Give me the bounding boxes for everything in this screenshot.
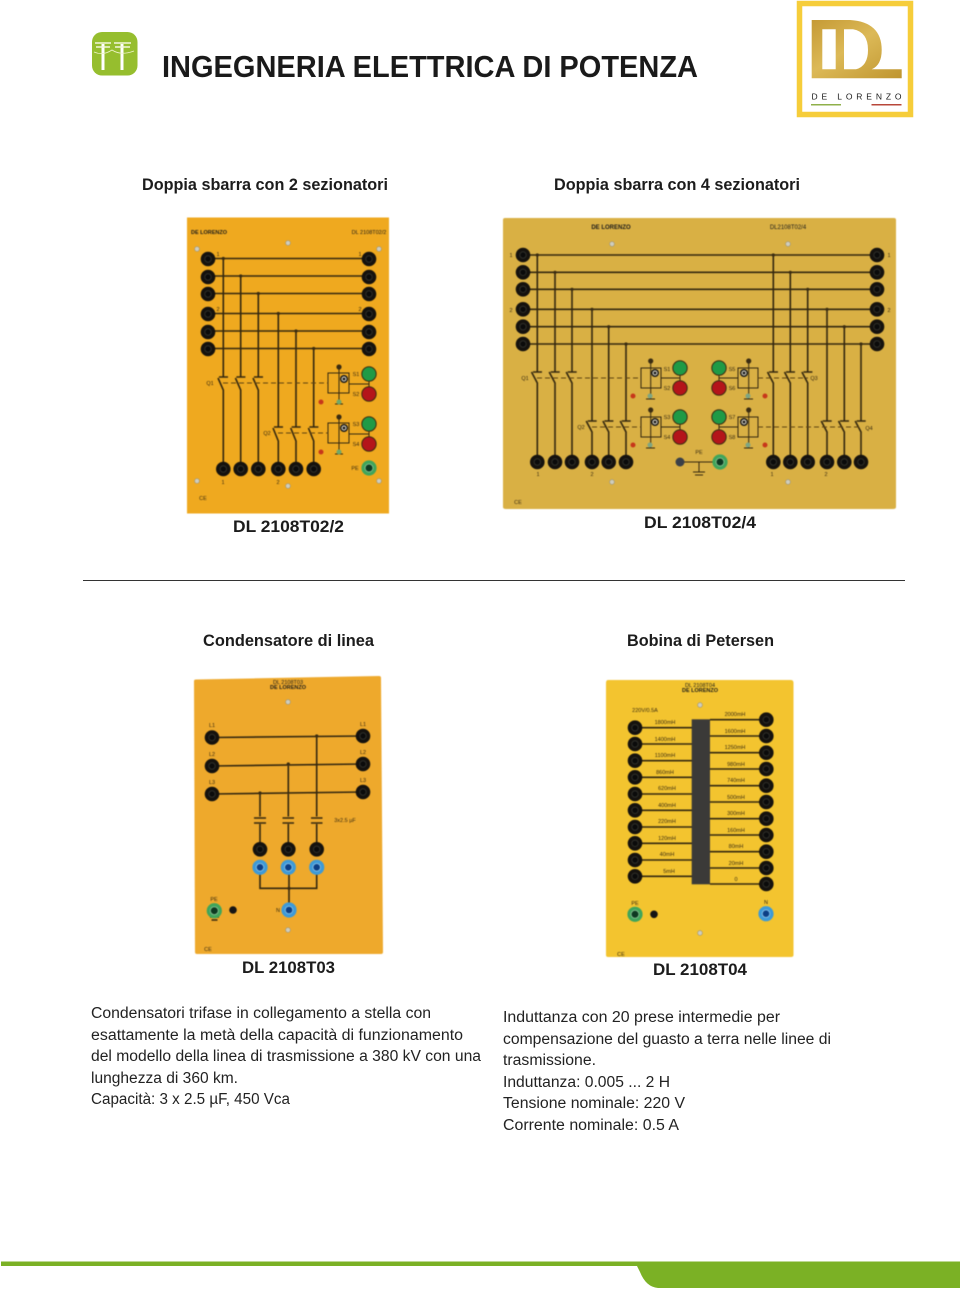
panel: DL 2108T02/4: S2 bbox=[664, 386, 670, 392]
panel: DL 2108T02/4: PE bbox=[695, 450, 703, 456]
panel: DL 2108T03: L3 bbox=[360, 778, 366, 784]
panel: DL 2108T02/2: 2 bbox=[358, 307, 362, 313]
panel: DL 2108T02/2: S4 bbox=[353, 442, 359, 448]
panel: DL 2108T04: CE bbox=[617, 952, 625, 958]
logo: De Lorenzo bbox=[800, 4, 910, 114]
panel: DL 2108T04: 5mH bbox=[663, 869, 675, 875]
panel: DL 2108T04 bbox=[606, 680, 794, 958]
panel: DL 2108T03: DL 2108T03 bbox=[273, 680, 303, 686]
panel: DL 2108T04: 20mH bbox=[729, 861, 743, 867]
panel: DL 2108T02/2: Q2 bbox=[263, 431, 271, 437]
panel: DL 2108T02/4: Q4 bbox=[865, 426, 873, 432]
panel: DL 2108T04: 980mH bbox=[727, 762, 745, 768]
panel: DL 2108T02/4: 2 bbox=[509, 308, 513, 314]
footer bar bbox=[1, 1262, 960, 1288]
text block: Petersen coil description: Corrente nominale: 0.5 A bbox=[503, 1117, 680, 1134]
panel: DL 2108T02/4 bbox=[503, 218, 896, 509]
panel: DL 2108T02/2: PE bbox=[351, 466, 359, 472]
text block: Petersen coil description: Induttanza: 0.005 ... 2 H bbox=[503, 1074, 670, 1091]
panel: DL 2108T02/4: S8 bbox=[729, 435, 735, 441]
panel: DL 2108T02/2: S1 bbox=[353, 372, 359, 378]
text block: capacitor description: lunghezza di 360 km. bbox=[91, 1070, 238, 1087]
panel: DL 2108T04: 620mH bbox=[658, 786, 676, 792]
text block: Petersen coil description: trasmissione. bbox=[503, 1052, 596, 1069]
panel: DL 2108T04: 1600mH bbox=[725, 729, 745, 735]
panel: DL 2108T04: 1250mH bbox=[725, 745, 745, 751]
panel: DL 2108T03: DE LORENZO bbox=[270, 685, 307, 691]
panel: DL 2108T02/4: 2 bbox=[590, 472, 594, 478]
panel: DL 2108T04: 220mH bbox=[658, 819, 676, 825]
panel: DL 2108T02/2: DL 2108T02/2 bbox=[352, 230, 386, 236]
panel: DL 2108T02/2: S3 bbox=[353, 422, 359, 428]
panel: DL 2108T02/4: 1 bbox=[509, 253, 513, 259]
logo: De Lorenzo: DE LORENZO bbox=[812, 92, 902, 102]
panel: DL 2108T04: 400mH bbox=[658, 803, 676, 809]
panel: DL 2108T02/4: CE bbox=[514, 500, 522, 506]
panel: DL 2108T02/2: 1 bbox=[221, 480, 225, 486]
label: DL 2108T03: DL 2108T03 bbox=[242, 959, 335, 977]
text block: Petersen coil description: Tensione nominale: 220 V bbox=[503, 1095, 686, 1112]
panel: DL 2108T04: 740mH bbox=[727, 778, 745, 784]
text block: capacitor description: del modello della linea di trasmissione a 380 kV con una bbox=[91, 1048, 481, 1065]
text block: capacitor description: Condensatori trifase in collegamento a stella con bbox=[91, 1005, 431, 1022]
title: INGEGNERIA ELETTRICA DI POTENZA bbox=[162, 49, 698, 84]
panel: DL 2108T02/4: Q1 bbox=[521, 376, 529, 382]
panel: DL 2108T03: L1 bbox=[209, 723, 215, 729]
panel: DL 2108T02/4: 1 bbox=[887, 253, 891, 259]
panel: DL 2108T02/4: 1 bbox=[770, 472, 774, 478]
panel: DL 2108T03: L3 bbox=[209, 780, 215, 786]
text block: Petersen coil description bbox=[503, 1009, 831, 1134]
panel: DL 2108T04: 500mH bbox=[727, 795, 745, 801]
divider bbox=[83, 580, 905, 581]
heading: double busbar 2 disconnectors: Doppia sbarra con 2 sezionatori bbox=[142, 176, 388, 194]
panel: DL 2108T02/4: DL2108T02/4 bbox=[770, 225, 807, 231]
panel: DL 2108T04: 1800mH bbox=[655, 720, 675, 726]
panel: DL 2108T03: 3x2.5 µF bbox=[334, 818, 356, 824]
panel: DL 2108T02/2 bbox=[187, 218, 389, 514]
panel: DL 2108T02/2: Q1 bbox=[206, 381, 214, 387]
panel: DL 2108T02/4: S1 bbox=[664, 367, 670, 373]
panel: DL 2108T02/4: S4 bbox=[664, 435, 670, 441]
text block: capacitor description bbox=[91, 1005, 481, 1108]
heading: line capacitor: Condensatore di linea bbox=[203, 632, 375, 650]
text block: capacitor description: Capacità: 3 x 2.5 µF, 450 Vca bbox=[91, 1091, 290, 1108]
panel: DL 2108T03: CE bbox=[204, 947, 212, 953]
panel: DL 2108T02/4: 2 bbox=[824, 472, 828, 478]
label: DL 2108T02/4: DL 2108T02/4 bbox=[644, 514, 757, 532]
panel: DL 2108T03: L2 bbox=[360, 750, 366, 756]
panel: DL 2108T02/2: 1 bbox=[358, 252, 362, 258]
heading: Petersen coil: Bobina di Petersen bbox=[627, 632, 774, 650]
label: DL 2108T02/2: DL 2108T02/2 bbox=[233, 518, 344, 536]
panel: DL 2108T02/4: S6 bbox=[729, 386, 735, 392]
panel: DL 2108T02/4: S5 bbox=[729, 367, 735, 373]
text block: Petersen coil description: compensazione del guasto a terra nelle linee di bbox=[503, 1031, 831, 1048]
panel: DL 2108T02/4: S7 bbox=[729, 415, 735, 421]
panel: DL 2108T02/2: S2 bbox=[353, 392, 359, 398]
panel: DL 2108T03 bbox=[194, 676, 383, 954]
panel: DL 2108T02/4: S3 bbox=[664, 415, 670, 421]
panel: DL 2108T04: DL 2108T04 bbox=[685, 683, 715, 689]
panel: DL 2108T04: 1400mH bbox=[655, 737, 675, 743]
panel: DL 2108T04: 160mH bbox=[727, 828, 745, 834]
panel: DL 2108T04: 40mH bbox=[660, 852, 674, 858]
panel: DL 2108T04: DE LORENZO bbox=[682, 688, 719, 694]
panel: DL 2108T03: L1 bbox=[360, 722, 366, 728]
panel: DL 2108T04: 220V/0.5A bbox=[632, 708, 658, 714]
panel: DL 2108T02/4: 1 bbox=[536, 472, 540, 478]
panel: DL 2108T02/4: Q3 bbox=[810, 376, 818, 382]
panel: DL 2108T04: 0 bbox=[734, 877, 738, 883]
panel: DL 2108T03: L2 bbox=[209, 752, 215, 758]
text block: capacitor description: esattamente la metà della capacità di funzionamento bbox=[91, 1027, 463, 1044]
panel: DL 2108T02/4: Q2 bbox=[577, 425, 585, 431]
panel: DL 2108T02/2: 2 bbox=[216, 307, 220, 313]
panel: DL 2108T03: N bbox=[276, 908, 280, 914]
text block: Petersen coil description: Induttanza con 20 prese intermedie per bbox=[503, 1009, 780, 1026]
panel: DL 2108T02/4: 2 bbox=[887, 308, 891, 314]
panel: DL 2108T04: 860mH bbox=[656, 770, 674, 776]
panel: DL 2108T02/2: 2 bbox=[276, 480, 280, 486]
icon: green power-line app icon bbox=[92, 32, 138, 76]
panel: DL 2108T02/2: CE bbox=[199, 496, 207, 502]
panel: DL 2108T04: N bbox=[764, 900, 768, 906]
panel: DL 2108T02/2: DE LORENZO bbox=[191, 230, 228, 236]
panel: DL 2108T04: PE bbox=[631, 901, 639, 907]
panel: DL 2108T04: 120mH bbox=[658, 836, 676, 842]
heading: double busbar 4 disconnectors: Doppia sbarra con 4 sezionatori bbox=[554, 176, 800, 194]
panel: DL 2108T04: 1100mH bbox=[655, 753, 675, 759]
panel: DL 2108T03: PE bbox=[210, 897, 218, 903]
panel: DL 2108T04: 2000mH bbox=[725, 712, 745, 718]
panel: DL 2108T04: 300mH bbox=[727, 811, 745, 817]
panel: DL 2108T02/4: DE LORENZO bbox=[591, 225, 631, 231]
label: DL 2108T04: DL 2108T04 bbox=[653, 961, 748, 979]
panel: DL 2108T04: 80mH bbox=[729, 844, 743, 850]
panel: DL 2108T02/2: 1 bbox=[216, 252, 220, 258]
